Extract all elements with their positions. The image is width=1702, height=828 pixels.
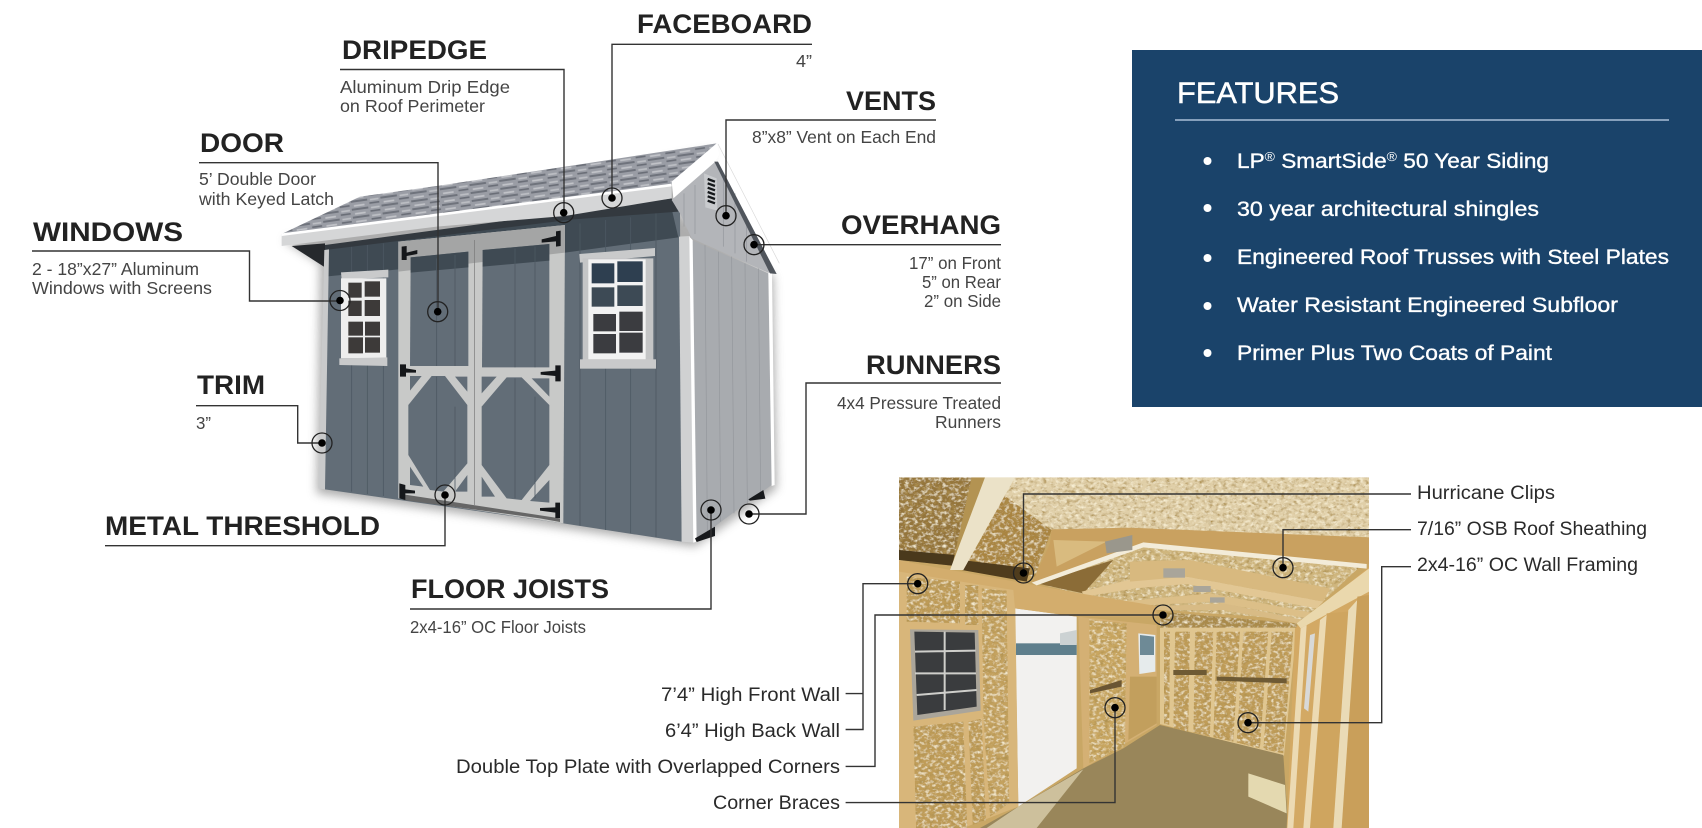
feature: shingles: 30 year architectural shingles xyxy=(1237,198,1539,221)
truss one xyxy=(1052,528,1369,538)
callout: corner braces xyxy=(713,698,1125,814)
callout: floor joists: FLOOR JOISTS xyxy=(411,574,609,604)
callout: runners: Runners xyxy=(935,412,1001,432)
callout: metal threshold xyxy=(105,485,455,546)
further trusses xyxy=(1082,577,1323,608)
callout: door: DOOR xyxy=(200,128,284,158)
callout: faceboard: FACEBOARD xyxy=(637,9,812,39)
gable fascia xyxy=(672,143,719,198)
callout: door: with Keyed Latch xyxy=(198,189,334,209)
ceiling sheathing xyxy=(1002,477,1369,538)
callout: overhang xyxy=(744,210,1001,311)
floor xyxy=(980,725,1288,828)
back wall xyxy=(1160,612,1297,628)
callout: hurricane clips xyxy=(1014,483,1555,583)
callout: front and back wall: 6’4” High Back Wall xyxy=(665,721,840,742)
feature: subfloor: Water Resistant Engineered Subfloor xyxy=(1237,294,1618,317)
callout: runners xyxy=(739,350,1001,524)
callout: faceboard xyxy=(602,9,812,208)
feature: siding: SmartSide xyxy=(1275,150,1387,173)
callout: overhang: OVERHANG xyxy=(841,210,1001,240)
shed illustration xyxy=(282,143,779,547)
callout: dripedge xyxy=(340,35,574,223)
callout: windows: Windows with Screens xyxy=(32,278,212,298)
callout: dripedge: Aluminum Drip Edge xyxy=(340,77,510,97)
framed window xyxy=(910,629,981,721)
callout: windows: WINDOWS xyxy=(33,217,183,247)
panel: features xyxy=(1132,50,1702,407)
feature: siding: LP xyxy=(1237,150,1263,173)
callout: dripedge: DRIPEDGE xyxy=(342,35,487,65)
callout: windows xyxy=(32,217,350,310)
vent xyxy=(704,173,717,211)
callout: overhang: 2” on Side xyxy=(924,291,1001,311)
callout: double top plate xyxy=(456,605,1173,778)
callout: wall framing xyxy=(1238,555,1638,733)
features heading: FEATURES xyxy=(1177,77,1339,110)
callout: vents: VENTS xyxy=(846,86,936,116)
callout: trim: TRIM xyxy=(197,370,265,400)
callout: roof sheathing: 7/16” OSB Roof Sheathing xyxy=(1417,519,1647,540)
callout: vents xyxy=(716,86,936,226)
callout: roof sheathing xyxy=(1273,519,1647,578)
callout: trim xyxy=(196,370,332,453)
door xyxy=(398,225,565,523)
interior photo xyxy=(899,477,1369,828)
runners xyxy=(695,490,765,542)
callout: faceboard: 4” xyxy=(796,51,812,71)
feature: paint: Primer Plus Two Coats of Paint xyxy=(1237,342,1552,365)
callout: overhang: 5” on Rear xyxy=(922,272,1001,292)
roof shingles xyxy=(282,143,717,234)
callout: dripedge: on Roof Perimeter xyxy=(340,96,485,116)
feature: siding: ® xyxy=(1387,149,1397,164)
callout: runners: 4x4 Pressure Treated xyxy=(837,393,1001,413)
callout: door: 5’ Double Door xyxy=(199,169,316,189)
left wall xyxy=(899,560,1018,828)
left window xyxy=(339,270,388,366)
callout: runners: RUNNERS xyxy=(866,350,1001,380)
front partition xyxy=(1078,617,1157,768)
callout: hurricane clips: Hurricane Clips xyxy=(1417,483,1555,504)
callout: front and back wall: 7’4” High Front Wall xyxy=(661,685,840,706)
callout: floor joists: 2x4-16” OC Floor Joists xyxy=(410,617,586,637)
doorway xyxy=(1015,608,1077,807)
callout: vents: 8”x8” Vent on Each End xyxy=(752,127,936,147)
callout: double top plate: Double Top Plate with Overlapped Corners xyxy=(456,757,840,778)
callout: floor joists xyxy=(410,500,721,637)
right wall xyxy=(1287,567,1369,828)
hinges xyxy=(399,231,561,518)
feature: siding xyxy=(1204,149,1549,173)
callout: front and back wall xyxy=(661,574,928,742)
feature: siding: 50 Year Siding xyxy=(1397,150,1549,173)
callout: metal threshold: METAL THRESHOLD xyxy=(105,511,380,541)
callout: windows: 2 - 18”x27” Aluminum xyxy=(32,259,199,279)
right window xyxy=(579,248,656,369)
callout: wall framing: 2x4-16” OC Wall Framing xyxy=(1417,555,1638,576)
callout: overhang: 17” on Front xyxy=(909,253,1001,273)
inner ceiling xyxy=(1037,545,1360,620)
callout: corner braces: Corner Braces xyxy=(713,793,840,814)
callout: door xyxy=(198,128,448,322)
feature: trusses: Engineered Roof Trusses with Steel Plates xyxy=(1237,246,1669,269)
feature: siding: ® xyxy=(1265,149,1275,164)
callout: trim: 3” xyxy=(196,413,211,433)
